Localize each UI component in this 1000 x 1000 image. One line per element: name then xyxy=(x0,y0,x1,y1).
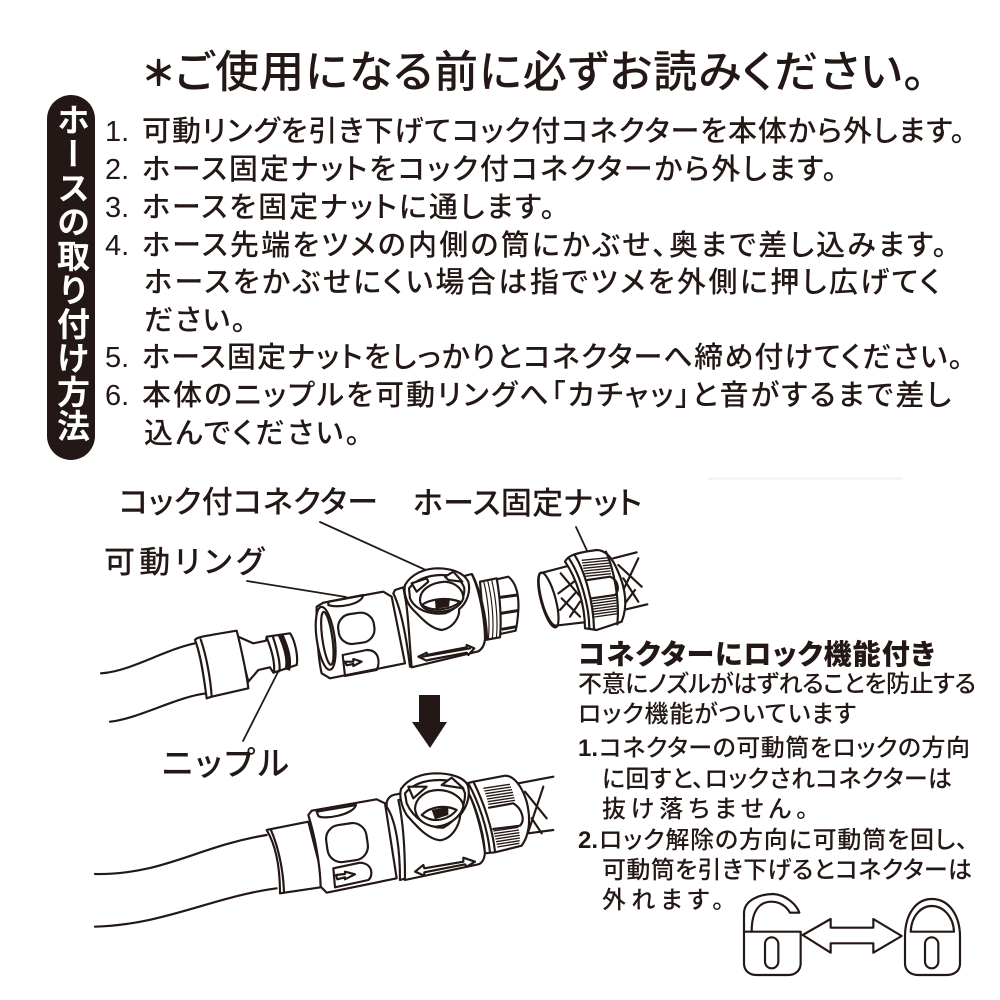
part labels: ニップル xyxy=(162,745,289,782)
instructions list: 2. xyxy=(105,154,129,186)
illustration: assembled connector xyxy=(95,773,553,927)
hose and ring xyxy=(95,799,397,927)
body, dial and nut xyxy=(387,773,553,880)
part labels: ホース固定ナット xyxy=(413,486,642,521)
side label: hose attachment method: ホースの取り付け方法 xyxy=(52,103,90,443)
part labels: コック付コネクター xyxy=(119,485,378,520)
lock description: ロック機能がついています xyxy=(578,701,856,728)
part labels xyxy=(104,485,642,782)
instructions list: 5. xyxy=(105,342,129,374)
lock heading: コネクターにロック機能付き xyxy=(578,639,935,670)
lock description: 可動筒を引き下げるとコネクターは xyxy=(602,857,972,884)
icon: unlocked padlock xyxy=(744,894,801,975)
instructions list: ホースをかぶせにくい場合は指でツメを外側に押し広げてく xyxy=(144,266,940,299)
lock description: 不意にノズルがはずれることを防止する xyxy=(578,671,976,698)
lock description: 1. xyxy=(578,735,598,762)
illustration: nipple with hose xyxy=(101,631,297,722)
lock description xyxy=(578,671,976,914)
lock description: 2. xyxy=(578,827,598,854)
icon: double arrow xyxy=(803,919,902,953)
lock description: 外れます。 xyxy=(602,887,724,914)
instructions list: 本体のニップルを可動リングへ「カチャッ」と音がするまで差し xyxy=(142,379,951,412)
down arrow xyxy=(412,695,447,748)
instructions list: ださい。 xyxy=(144,305,246,337)
instructions list: ホース固定ナットをしっかりとコネクターへ締め付けてください。 xyxy=(142,341,963,374)
instructions list: 3. xyxy=(105,192,129,224)
quick-release ring xyxy=(312,592,405,678)
title: ご使用になる前に必ずお読みください。 xyxy=(175,48,925,97)
leader lines xyxy=(243,522,602,741)
instructions list: ホースを固定ナットに通します。 xyxy=(142,192,555,224)
lock description: ロック解除の方向に可動筒を回し、 xyxy=(599,827,968,854)
instructions list: ホース固定ナットをコック付コネクターから外します。 xyxy=(142,153,837,186)
instructions list: 6. xyxy=(105,380,129,412)
instructions list: 4. xyxy=(105,230,129,262)
part labels: 可動リング xyxy=(104,545,265,580)
body xyxy=(393,568,518,667)
instructions list: 可動リングを引き下げてコック付コネクターを本体から外します。 xyxy=(142,115,965,148)
title: ＊ xyxy=(141,55,176,94)
instructions list: ホース先端をツメの内側の筒にかぶせ、奥まで差し込みます。 xyxy=(142,229,947,262)
lock description: 抜け落ちません。 xyxy=(602,796,808,823)
instructions list: 込んでください。 xyxy=(144,418,360,450)
illustration: connector with cock xyxy=(312,568,518,678)
lock description: に回すと、ロックされコネクターは xyxy=(602,766,952,793)
icon: locked padlock xyxy=(905,899,960,975)
illustration: hose fixing nut xyxy=(534,550,647,630)
lock description: コネクターの可動筒をロックの方向 xyxy=(599,735,970,762)
instructions list xyxy=(105,115,965,450)
lock feature panel xyxy=(578,639,976,914)
instructions list: 1. xyxy=(105,116,129,148)
